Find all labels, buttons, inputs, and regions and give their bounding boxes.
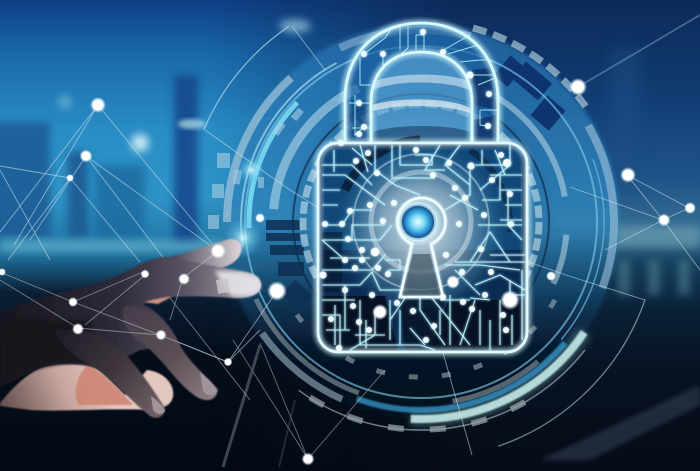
circuit traces — [322, 145, 525, 350]
shackle band fill — [345, 23, 498, 143]
fingernails — [200, 372, 217, 395]
third finger — [55, 330, 165, 418]
bright bottom arc — [411, 332, 584, 419]
tile ring upper right — [473, 28, 586, 107]
grey band ring — [227, 78, 291, 222]
padlock body — [318, 143, 527, 352]
second finger — [123, 306, 218, 400]
upper finger — [165, 239, 242, 274]
pink palm crease — [76, 365, 133, 405]
fingertip underside tint — [145, 296, 172, 304]
padlock outline — [318, 143, 527, 352]
dark tiles upper right — [494, 55, 566, 131]
dim thick rays — [223, 345, 295, 467]
hand back — [0, 257, 261, 388]
circuit nodes — [320, 29, 514, 351]
inner cyan arcs — [249, 102, 297, 228]
hand reaching toward lock — [0, 239, 261, 418]
concentric tech rings — [204, 24, 645, 446]
reflected square on finger — [216, 278, 230, 294]
shackle opening — [371, 52, 472, 143]
lower-left shadow — [0, 320, 100, 385]
dark inner tiles left — [266, 220, 313, 311]
overlay lines over the hand — [0, 251, 250, 400]
shackle outline — [345, 23, 498, 143]
icon: padlock — [318, 23, 527, 352]
bright flares — [237, 156, 265, 184]
finger highlight — [215, 271, 260, 296]
lower palm and thumb — [0, 362, 173, 411]
thin outer arcs — [204, 26, 289, 130]
outer dashed ring — [299, 350, 585, 430]
keyhole — [395, 198, 446, 297]
body shading — [322, 136, 525, 352]
dark corners of the shackle — [348, 68, 497, 143]
bright lens flares — [370, 247, 520, 320]
rectangle tiles left — [208, 107, 304, 229]
shackle circuitry — [349, 26, 497, 135]
middle rings — [274, 88, 358, 209]
